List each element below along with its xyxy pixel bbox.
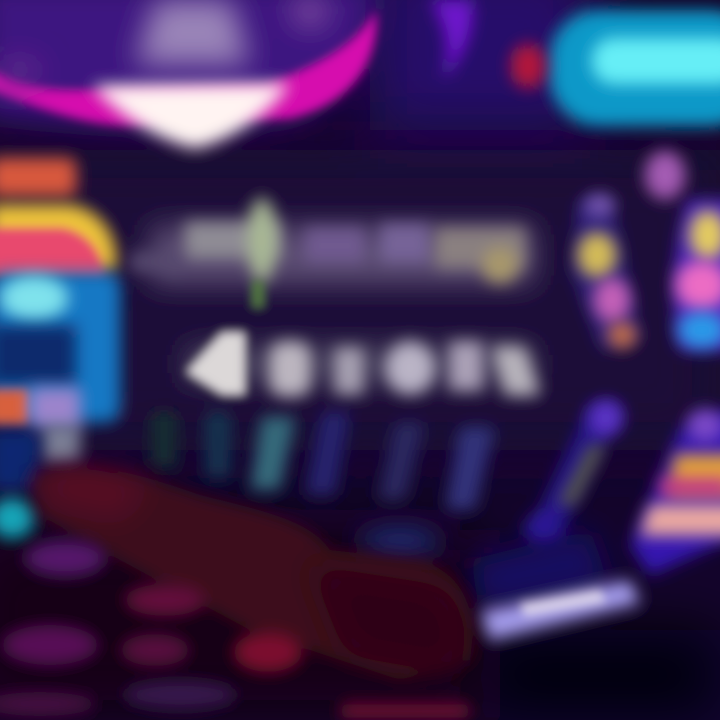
purple neon arc xyxy=(430,0,473,80)
cyan neon sign xyxy=(511,10,720,126)
ceiling lamp with magenta glow xyxy=(0,0,376,148)
red seating xyxy=(30,467,472,718)
central sign panel xyxy=(130,198,535,308)
central blurred numerals xyxy=(185,332,540,396)
right slot machine lower xyxy=(630,405,720,575)
floor glow lights xyxy=(0,540,302,716)
right slot machine upper xyxy=(572,151,720,350)
rainbow slot machine left xyxy=(0,158,120,538)
lit console tray xyxy=(358,530,640,640)
row of slot reels below sign xyxy=(150,400,623,546)
